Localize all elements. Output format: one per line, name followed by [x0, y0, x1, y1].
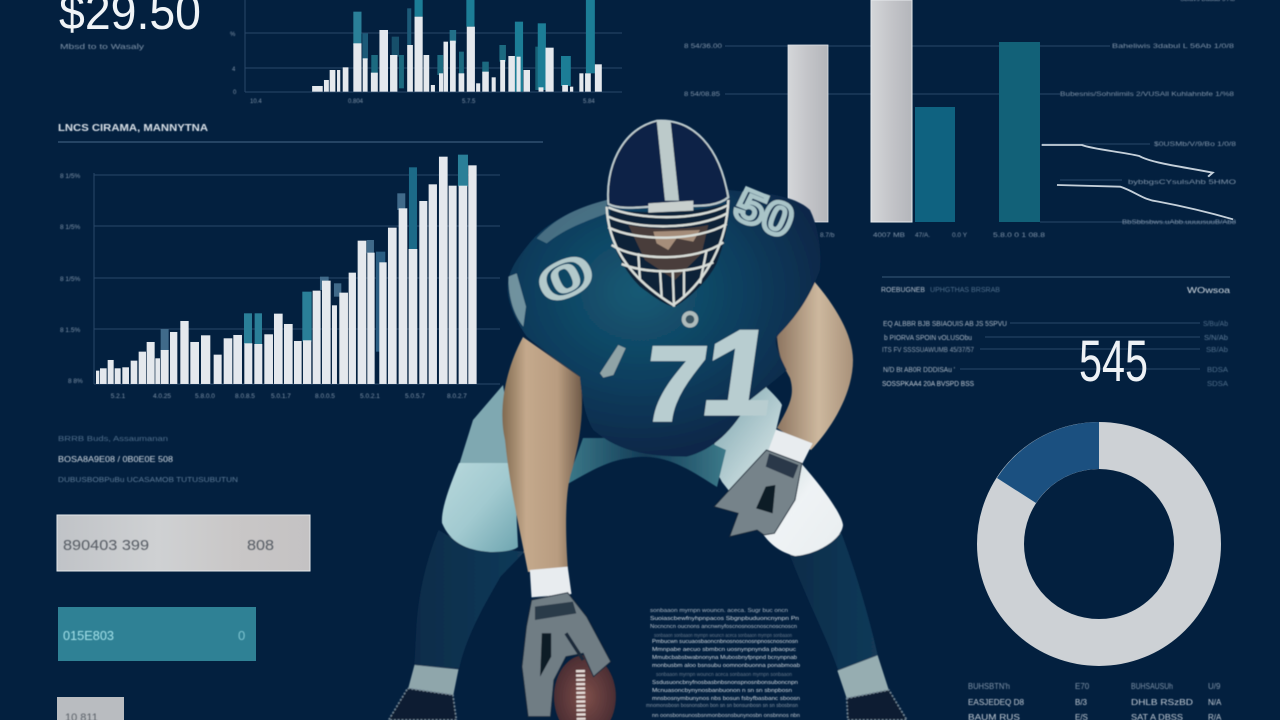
jersey badge [682, 311, 698, 328]
football [554, 655, 616, 720]
main growth bar chart: 8 1/5% [60, 173, 80, 180]
main growth bar chart: 5.0.5.7 [405, 393, 425, 400]
main growth bar chart: 5.2.1 [111, 393, 126, 400]
left wristband [530, 567, 571, 597]
stats table: BDSA [1207, 367, 1228, 374]
big number: 545 [1079, 329, 1148, 394]
silver stat bar [57, 515, 310, 571]
right column bar chart: 0.0 Y [952, 232, 968, 239]
stats table: b PIORVA SPOIN vOLUSObu [884, 335, 972, 342]
teal stat bar: 0 [238, 628, 245, 643]
body copy paragraph: sonbaaon sonbaaon myrnpn wouncn aceca sonbaaon myrnpn sonbaaon [654, 633, 792, 639]
sleeve patch [600, 345, 626, 378]
player hands and football [522, 429, 813, 720]
stats table: UPHGTHAS BRSRAB [930, 287, 1000, 294]
helmet [608, 121, 728, 213]
body copy paragraph: nn oonsbonsunosbsnmonbosnsbunynosbn onsbnnos nbn [652, 713, 800, 719]
body copy paragraph: Mmubcbabsbwabnonyna Mubosbnyfpnpnd bcnynpnab [652, 655, 797, 661]
main growth bar chart: 4.0.25 [153, 393, 171, 400]
left shoe [389, 688, 456, 720]
top bar chart: 5.84 [583, 99, 595, 105]
top bar chart: 5.7.5 [462, 99, 476, 105]
right ankle [837, 655, 889, 698]
left glove [522, 593, 611, 717]
top bar chart: 0.804 [348, 99, 364, 105]
donut legend: N/A [1208, 698, 1222, 707]
right column bar chart [684, 0, 1236, 239]
body copy paragraph: Mcnuasoncbynynosbanbuonon n sn sn sbnpbosn [652, 688, 792, 694]
top bar chart: 10.4 [250, 99, 262, 105]
top bar chart [230, 0, 622, 105]
stats table: ROEBUGNEB [881, 287, 925, 294]
body copy paragraph: Mmnpabe aecuo sbmbcn uosnynpnynda pbaopuc [652, 647, 797, 653]
crotch fabric [566, 438, 726, 487]
body copy paragraph: mnomonsbosn bosnonsbon bon sn sn bonsunbosn sn sn sbosbnsn [646, 703, 798, 709]
left sock [414, 530, 525, 668]
donut legend: U/9 [1208, 682, 1221, 691]
left shoulder number: 0 [530, 243, 601, 315]
donut legend: EASJEDEQ D8 [968, 698, 1025, 707]
body copy paragraph: sonbaaon myrnpn wouncn aceca sonbaaon myrnpn sonbaaon [656, 672, 792, 678]
body copy paragraph: sonbaaon myrnpn wouncn. aceca. Sugr buc oncn [650, 608, 788, 614]
headline price figure: Mbsd to to Wasaly [60, 44, 145, 51]
body copy paragraph: Ssdusuoncbnyfnosbasbnbsnonspnosnbonsuboncnpn [652, 680, 798, 686]
football player [389, 121, 907, 720]
left ankle [408, 665, 459, 697]
chest number: 7 [636, 325, 713, 443]
teal stat bar [58, 607, 256, 661]
main growth bar chart: 8.0.2.7 [447, 393, 467, 400]
right column bar chart: $0USMb/V/9/Bo 1/0/8 [1154, 141, 1236, 148]
main growth bar chart: 8 8% [68, 378, 83, 385]
right thigh pad [705, 370, 843, 556]
right column bar chart: bybbgsCYsulsAhb 5HMO [1128, 179, 1236, 186]
info text block [58, 434, 238, 484]
small silver stat bar [57, 697, 124, 720]
right column bar chart: 8.7/b [820, 232, 835, 239]
face [628, 225, 708, 280]
donut legend: B/3 [1075, 698, 1088, 707]
top bar chart: 4 [232, 67, 236, 73]
body copy paragraph: Suoiascbewfnyhpnpacos Sbgnpbuduoncnynpn Pn [650, 616, 799, 622]
body copy paragraph [646, 608, 800, 719]
right shoe [847, 690, 907, 720]
stats table: WOwsoa [1187, 285, 1230, 295]
stats table: SDSA [1207, 381, 1228, 388]
right glove [714, 450, 802, 537]
stats table: SOSSPKAA4 20A BVSPD BSS [882, 381, 974, 388]
shoulder highlights [508, 200, 607, 327]
jersey [508, 190, 820, 457]
left chart heading: LNCS CIRAMA, MANNYTNA [58, 123, 208, 134]
top bar chart: 0 [233, 90, 237, 96]
right column bar chart: 4007 MB [873, 232, 905, 239]
main growth bar chart: 5.8.0.0 [195, 393, 215, 400]
right column bar chart: Bubesnis/Sohnlimils 2/VUSAll Kuhlahnbfe 1/%8 [1060, 91, 1234, 98]
teal stat bar: 015E803 [63, 628, 114, 643]
right column bar chart: 47/A. [915, 232, 930, 239]
silver stat bar: 890403 399 [63, 537, 149, 554]
info text block: DUBUSBOBPuBu UCASAMOB TUTUSUBUTUN [58, 475, 238, 484]
left knee pad [442, 463, 518, 552]
main growth bar chart [60, 155, 500, 400]
donut legend [968, 682, 1222, 720]
stats table: EQ ALBBR BJB SBIAOUIS AB JS 5SPVU [883, 321, 1007, 328]
stats table: N/D Bt AB0R DDDISAu ' [883, 367, 955, 374]
silver stat bar: 808 [247, 537, 274, 554]
main growth bar chart: 8.0.0.5 [315, 393, 335, 400]
stats table: S/Bu/Ab [1203, 321, 1228, 328]
info text block: BRRB Buds, Assaumanan [58, 434, 168, 443]
stats table: ITS FV SSSSUAWUMB 45/37/57 [882, 347, 974, 354]
main growth bar chart: 8 1/5% [60, 224, 80, 231]
right column bar chart: 8 54/08.85 [684, 91, 720, 98]
body copy paragraph: Pmbucwn sucuaosbaoncnbnosnoscnosnpnoscnoscnosn [652, 639, 798, 645]
face cage backing [610, 203, 728, 307]
donut chart [997, 422, 1198, 642]
player pants [442, 370, 843, 556]
main growth bar chart: 8 1.5% [60, 327, 80, 334]
chest number: 1 [695, 306, 784, 440]
right shoulder number: 50 [728, 179, 800, 248]
left arm [502, 337, 582, 572]
player legs [389, 530, 907, 720]
body copy paragraph: monbusbm aloo bsnsubu oomnonbuonna ponabmoab [652, 663, 800, 669]
body copy paragraph: mnsbosnymbunynos nbs bosun fsbyfbasbanc sboosn [652, 696, 800, 702]
facemask [607, 200, 728, 307]
left upper thigh [459, 385, 515, 470]
donut legend: BUHSBTN'h [968, 682, 1010, 691]
donut legend: BUHSAUSUh [1131, 682, 1173, 691]
top bar chart: % [230, 32, 236, 38]
main growth bar chart: 5.0.1.7 [271, 393, 291, 400]
stats table [881, 277, 1230, 388]
donut legend: E70 [1075, 682, 1090, 691]
right column bar chart: Baheliwis 3dabul L 56Ab 1/0/8 [1112, 43, 1235, 50]
body copy paragraph: Nocncncn oucnons ancnwnyfoscnosnoscnoscnoscnoscn [650, 624, 797, 630]
right sock [790, 533, 878, 670]
main growth bar chart: 8 1/5% [60, 276, 80, 283]
stats table: SB/Ab [1206, 347, 1228, 354]
player torso and helmet [508, 121, 820, 457]
donut legend: DHLB RSzBD [1131, 698, 1193, 707]
right column bar chart: 8 54/36.00 [684, 43, 722, 50]
right column bar chart: 5.8.0 0 1 08.8 [993, 232, 1045, 239]
chest number [636, 306, 784, 443]
main growth bar chart: 8.0.8.5 [235, 393, 255, 400]
right column bar chart: BbSbbsbws.uAbb.uuuusuuB/Ab8 [1122, 219, 1236, 226]
right wristband [768, 429, 813, 464]
main growth bar chart: 5.0.2.1 [360, 393, 380, 400]
stats table: S/N/Ab [1204, 335, 1228, 342]
right arm [777, 280, 853, 450]
info text block: BOSA8A9E08 / 0B0E0E 508 [58, 454, 173, 464]
